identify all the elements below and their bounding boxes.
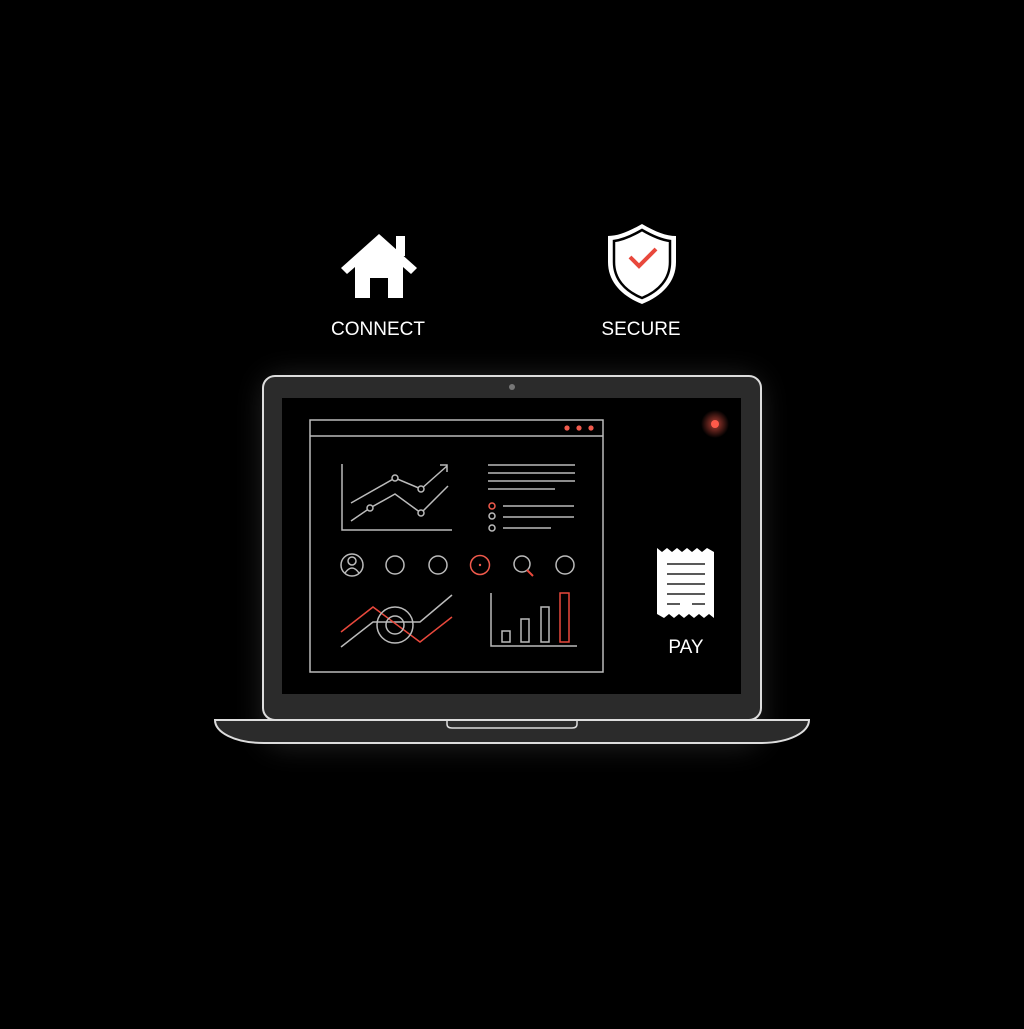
icon: house xyxy=(341,234,417,298)
dashboard window xyxy=(310,420,603,672)
wave chart xyxy=(341,595,452,647)
laptop glow xyxy=(263,376,761,746)
window dots xyxy=(564,425,594,431)
label: SECURE: SECURE xyxy=(601,319,681,340)
laptop xyxy=(215,376,809,743)
label: PAY: PAY xyxy=(668,637,704,658)
label: CONNECT: CONNECT xyxy=(331,319,425,340)
icon: shield xyxy=(608,224,676,304)
text list xyxy=(488,465,575,531)
indicator led xyxy=(701,410,729,438)
icon: receipt xyxy=(657,548,714,618)
bar chart xyxy=(491,593,577,646)
line chart xyxy=(342,464,452,530)
icon row xyxy=(341,554,574,576)
